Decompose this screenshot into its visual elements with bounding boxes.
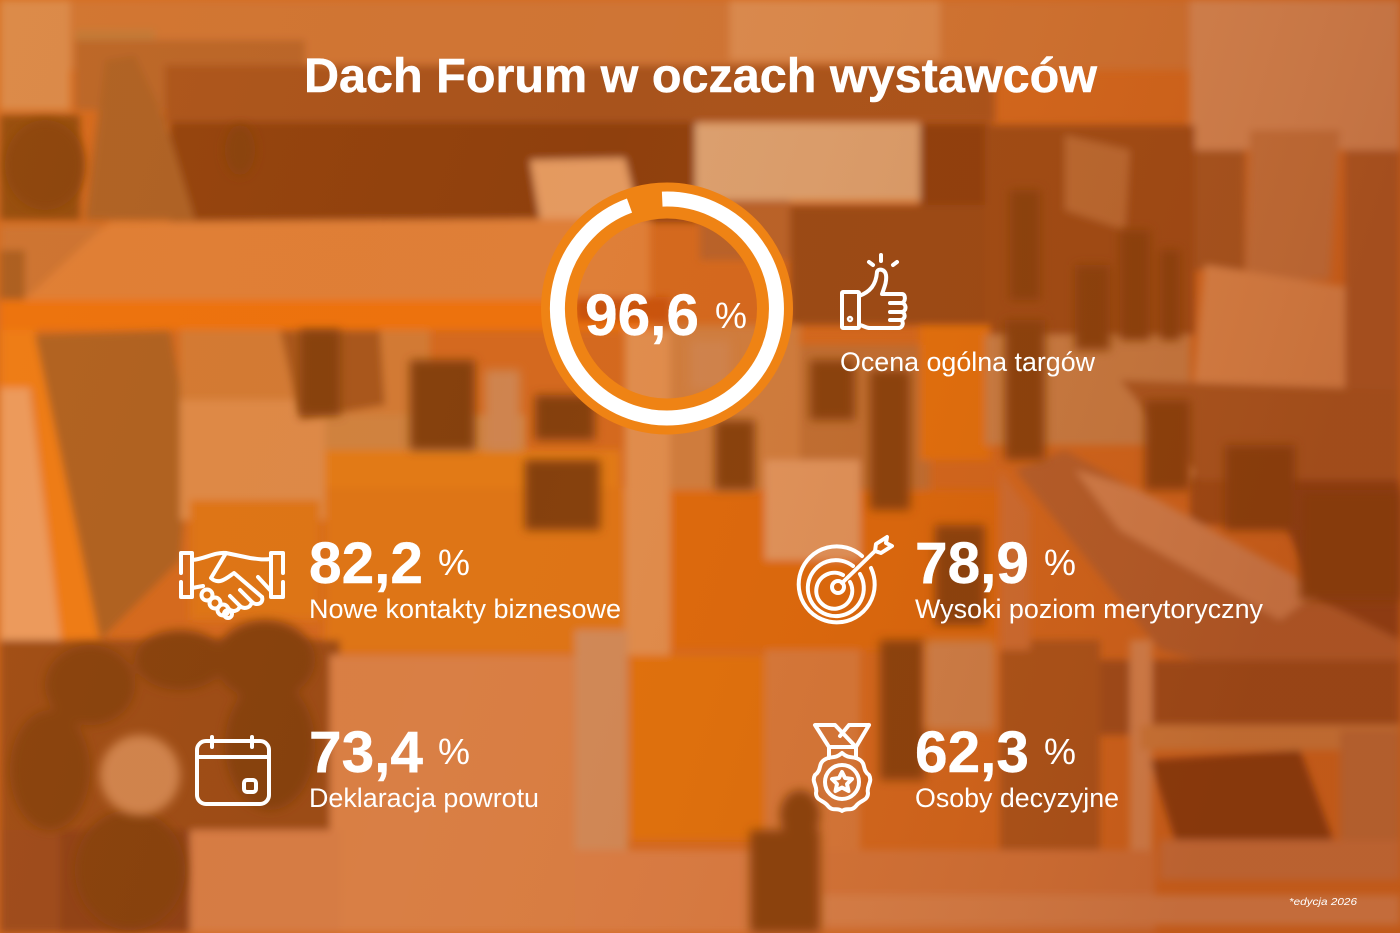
- stat: 73,4 % deklaracja powrotu: Deklaracja powrotu: [309, 783, 539, 813]
- stat: 82,2 % nowe kontakty: Nowe kontakty biznesowe: [309, 594, 621, 624]
- stat: 62,3 % osoby decyzyjne: 62,3: [915, 720, 1029, 785]
- donut chart: 96,6 %: 96,6: [585, 283, 699, 348]
- stat: 73,4 % deklaracja powrotu: %: [438, 731, 470, 772]
- icon: medal: [814, 725, 870, 811]
- stat: 62,3 % osoby decyzyjne: %: [1044, 731, 1076, 772]
- stat: 73,4 % deklaracja powrotu: 73,4: [309, 720, 423, 785]
- stat: 78,9 % wysoki poziom merytoryczny: 78,9: [915, 531, 1029, 596]
- donut chart: 96,6 %: %: [715, 295, 747, 336]
- icon: thumbs up: [842, 255, 906, 328]
- icon: handshake: [181, 553, 283, 618]
- stat: 62,3 % osoby decyzyjne: [814, 720, 1119, 813]
- stat: 62,3 % osoby decyzyjne: Osoby decyzyjne: [915, 783, 1119, 813]
- stat: 73,4 % deklaracja powrotu: [197, 720, 539, 813]
- donut chart: 96,6 %: [557, 199, 776, 418]
- stat: 78,9 % wysoki poziom merytoryczny: %: [1044, 542, 1076, 583]
- stat: 82,2 % nowe kontakty: [181, 531, 621, 624]
- stat: 82,2 % nowe kontakty: %: [438, 542, 470, 583]
- stat: 82,2 % nowe kontakty: 82,2: [309, 531, 423, 596]
- icon: target with arrow: [799, 537, 892, 622]
- stat: 78,9 % wysoki poziom merytoryczny: [799, 531, 1263, 624]
- title: Dach Forum w oczach wystawców: [304, 50, 1098, 103]
- footnote: *edycja 2026: [1289, 896, 1357, 908]
- icon: calendar: [197, 737, 269, 804]
- stat: 78,9 % wysoki poziom merytoryczny: Wysoki poziom merytoryczny: [915, 594, 1263, 624]
- label: Ocena ogólna targów: Ocena ogólna targów: [840, 347, 1095, 377]
